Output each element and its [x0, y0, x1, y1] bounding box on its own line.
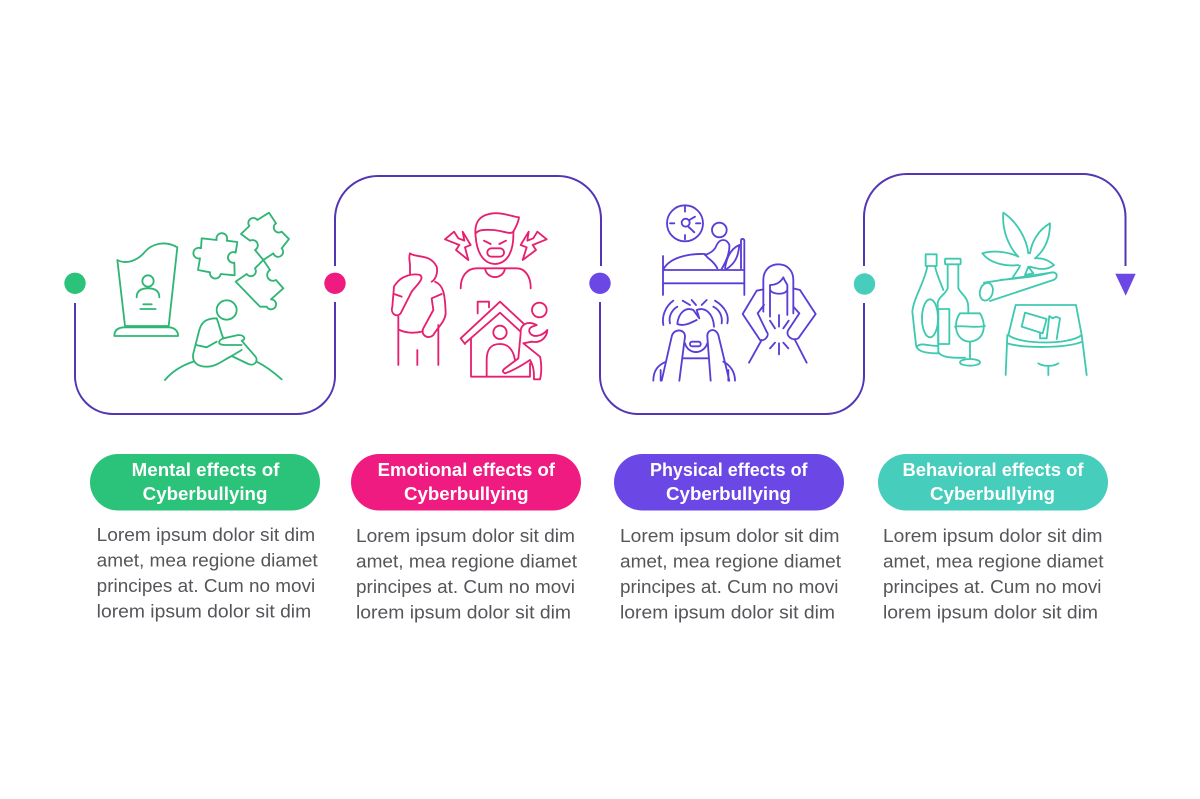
step 1 description: principes at. Cum no movi	[97, 575, 315, 596]
icon: mental effects	[114, 213, 289, 380]
step 1 label pill	[90, 454, 320, 510]
step 2 label pill	[351, 454, 581, 510]
step 2 description: amet, mea regione diamet	[356, 550, 577, 572]
icon: emotional effects	[392, 213, 547, 379]
flow line connecting the four steps	[75, 174, 1126, 414]
step 3 description	[620, 525, 841, 622]
step 3 label pill: Physical effects of	[650, 460, 809, 480]
step 1 description: Lorem ipsum dolor sit dim	[97, 524, 315, 545]
step 2 label pill: Cyberbullying	[404, 484, 528, 504]
step 3 label pill	[614, 454, 844, 510]
step 1 description	[97, 524, 318, 622]
step dot: pink	[324, 273, 346, 294]
step 3 description: Lorem ipsum dolor sit dim	[620, 525, 840, 546]
step 2 description: principes at. Cum no movi	[356, 576, 575, 597]
step 2 label pill: Emotional effects of	[378, 460, 556, 480]
step dot: teal	[854, 273, 875, 295]
arrowhead	[1115, 274, 1136, 296]
step 3 description: lorem ipsum dolor sit dim	[620, 602, 835, 622]
step 2 description: lorem ipsum dolor sit dim	[356, 602, 571, 622]
step 4 description: lorem ipsum dolor sit dim	[883, 602, 1098, 622]
step 4 label pill: Cyberbullying	[930, 484, 1055, 504]
step 4 description	[883, 525, 1104, 622]
icon: behavioral effects	[912, 213, 1087, 375]
step dot: purple	[589, 273, 611, 294]
step 4 description: principes at. Cum no movi	[883, 576, 1102, 597]
step 3 label pill: Cyberbullying	[666, 484, 791, 504]
step 3 description: principes at. Cum no movi	[620, 576, 838, 597]
step 2 description: Lorem ipsum dolor sit dim	[356, 525, 575, 546]
step dot: green	[64, 273, 86, 294]
step 4 description: Lorem ipsum dolor sit dim	[883, 525, 1102, 546]
step 1 description: amet, mea regione diamet	[97, 550, 318, 570]
step 1 label pill: Mental effects of	[132, 460, 280, 480]
step 4 label pill: Behavioral effects of	[902, 460, 1085, 480]
step 2 description	[356, 525, 577, 622]
step 4 label pill	[878, 454, 1108, 510]
icon: physical effects	[653, 205, 816, 381]
step 1 description: lorem ipsum dolor sit dim	[97, 600, 311, 622]
step 1 label pill: Cyberbullying	[143, 484, 267, 504]
step 3 description: amet, mea regione diamet	[620, 550, 841, 572]
step 4 description: amet, mea regione diamet	[883, 550, 1104, 572]
